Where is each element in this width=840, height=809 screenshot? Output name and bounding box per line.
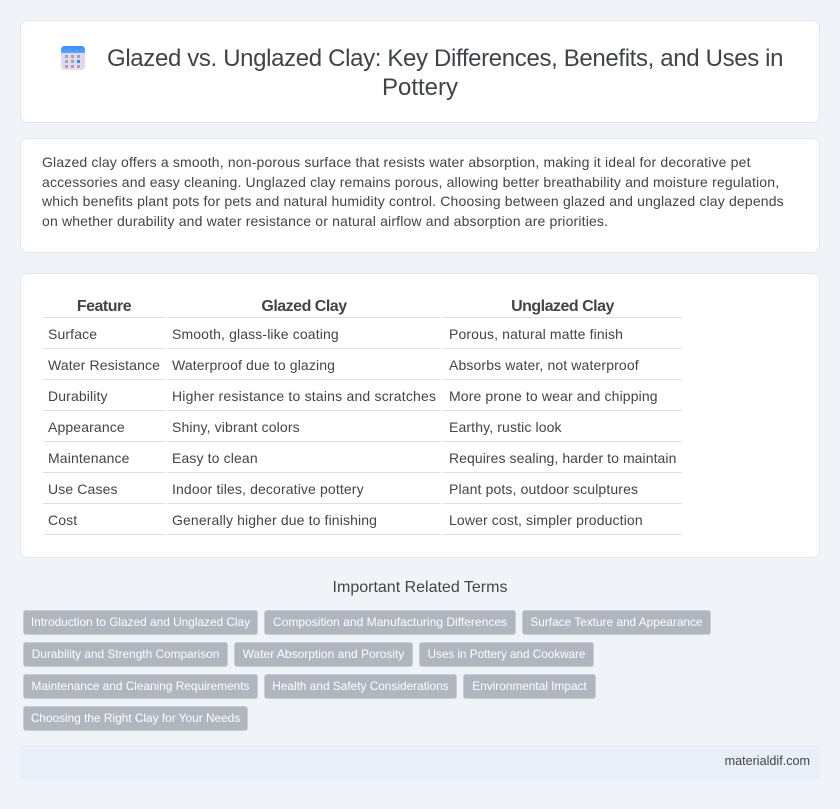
intro paragraph: which benefits plant pots for pets and natural humidity control. Choosing between glazed and unglazed clay depends xyxy=(42,193,784,209)
comparison table: Plant pots, outdoor sculptures xyxy=(449,481,638,497)
related term tags: Durability and Strength Comparison xyxy=(32,647,219,661)
comparison table: Higher resistance to stains and scratches xyxy=(172,388,436,404)
title: Glazed vs. Unglazed Clay: Key Differences, Benefits, and Uses in xyxy=(107,45,783,72)
comparison table: Durability xyxy=(48,388,108,404)
intro paragraph: on whether durability and water resistance or natural airflow and absorption are priorities. xyxy=(42,213,608,229)
comparison table: Requires sealing, harder to maintain xyxy=(449,450,676,466)
related term tags: Uses in Pottery and Cookware xyxy=(428,648,585,661)
related term tags xyxy=(23,610,711,731)
comparison table: Feature xyxy=(77,298,131,315)
comparison table: Appearance xyxy=(48,419,125,435)
comparison table: Waterproof due to glazing xyxy=(172,357,335,373)
footer bar: materialdif.com xyxy=(725,754,810,768)
intro text panel xyxy=(20,138,820,253)
comparison table: Indoor tiles, decorative pottery xyxy=(172,481,364,497)
header card xyxy=(20,20,820,123)
icon: calendar grid xyxy=(61,46,85,70)
related terms heading: Important Related Terms xyxy=(333,579,507,596)
comparison table: Porous, natural matte finish xyxy=(449,326,623,342)
title xyxy=(107,45,783,101)
related term tags: Health and Safety Considerations xyxy=(272,679,449,693)
comparison table: Surface xyxy=(48,326,97,342)
related term tags: Introduction to Glazed and Unglazed Clay xyxy=(31,615,250,629)
related term tags: Surface Texture and Appearance xyxy=(530,615,703,629)
comparison table: Shiny, vibrant colors xyxy=(172,419,300,435)
related term tags: Choosing the Right Clay for Your Needs xyxy=(31,711,240,725)
comparison table: Water Resistance xyxy=(48,357,160,373)
comparison table: Glazed Clay xyxy=(261,298,347,315)
comparison table: Lower cost, simpler production xyxy=(449,512,643,528)
comparison table: Maintenance xyxy=(48,450,130,466)
comparison table: Use Cases xyxy=(48,481,118,497)
comparison table: Generally higher due to finishing xyxy=(172,512,377,528)
comparison table: Absorbs water, not waterproof xyxy=(449,357,639,373)
comparison table: Easy to clean xyxy=(172,450,258,466)
intro paragraph: Glazed clay offers a smooth, non-porous surface that resists water absorption, making it ideal for decorative pet xyxy=(42,154,751,170)
footer bar xyxy=(20,745,820,779)
related term tags: Environmental Impact xyxy=(472,679,587,693)
comparison table: Earthy, rustic look xyxy=(449,419,562,435)
intro paragraph xyxy=(42,154,784,229)
title: Pottery xyxy=(382,74,458,101)
related term tags: Maintenance and Cleaning Requirements xyxy=(32,679,249,693)
comparison table: More prone to wear and chipping xyxy=(449,388,658,404)
related term tags: Composition and Manufacturing Differences xyxy=(273,615,507,629)
comparison table: Unglazed Clay xyxy=(511,298,614,315)
comparison table: Cost xyxy=(48,512,77,528)
table panel xyxy=(20,273,820,558)
comparison table: Smooth, glass-like coating xyxy=(172,326,339,342)
comparison table xyxy=(43,298,682,535)
intro paragraph: accessories and easy cleaning. Unglazed clay remains porous, allowing better breathability and moisture regulation, xyxy=(42,174,779,190)
related term tags: Water Absorption and Porosity xyxy=(243,647,404,661)
